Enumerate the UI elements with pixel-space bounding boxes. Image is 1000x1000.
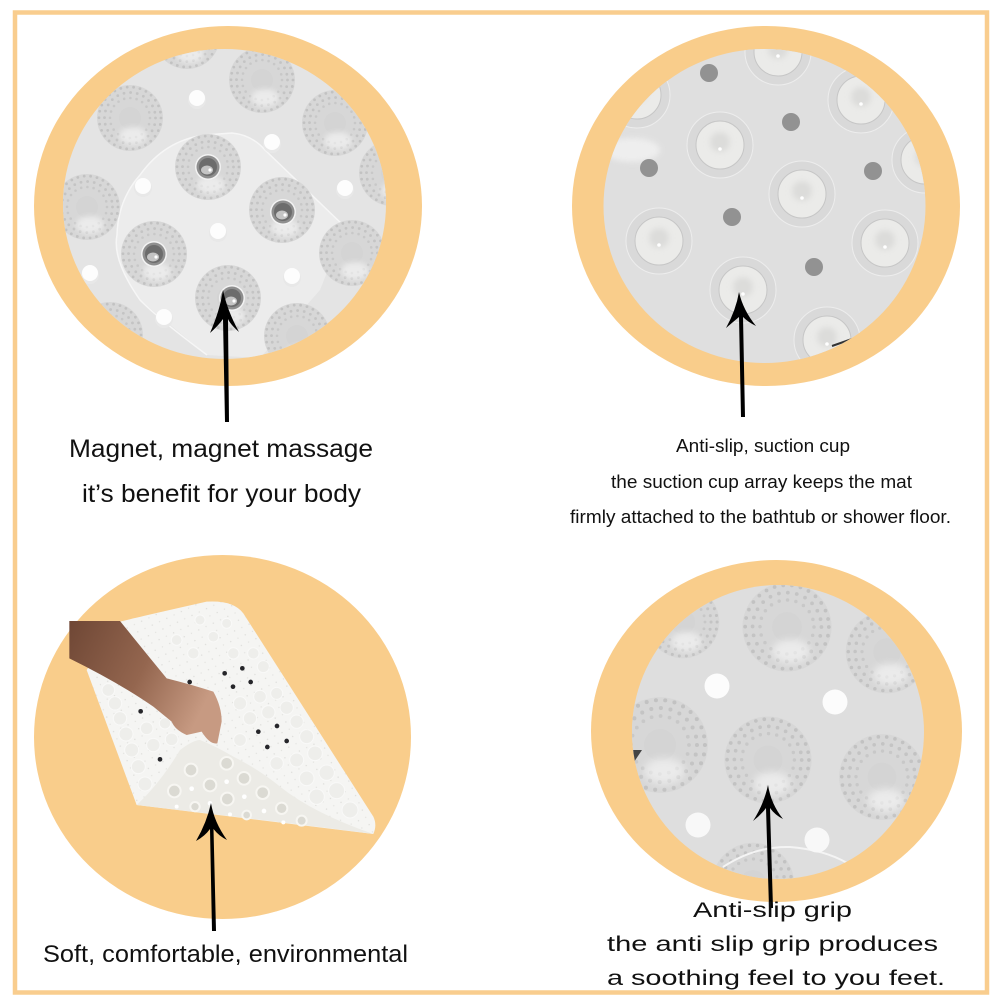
caption: magnet: it’s benefit for your body [82, 480, 362, 508]
caption: soft: Soft, comfortable, environmental [43, 941, 408, 968]
caption: anti-slip grip: Anti-slip grip [693, 899, 852, 922]
hand and arm [69, 621, 222, 744]
circle: suction cup photo [572, 19, 960, 386]
caption: suction cup: firmly attached to the bathtub or shower floor. [570, 507, 951, 527]
arrow [726, 292, 756, 417]
caption: magnet: Magnet, magnet massage [69, 435, 373, 463]
caption: anti-slip grip [607, 899, 945, 990]
caption: anti-slip grip: the anti slip grip produces [607, 933, 938, 956]
arrow [210, 290, 239, 422]
caption: anti-slip grip: a soothing feel to you feet. [607, 967, 945, 990]
caption: suction cup [570, 436, 951, 527]
caption: suction cup: the suction cup array keeps the mat [611, 472, 912, 492]
arrow [196, 803, 227, 931]
circle: grip photo [591, 560, 962, 925]
panel: anti-slip grip [591, 560, 962, 990]
panel: soft comfortable mat [34, 555, 411, 968]
mat flap [137, 740, 373, 834]
caption: magnet [69, 435, 373, 508]
circle: magnet photo [34, 3, 425, 386]
panel: magnet massage [34, 3, 425, 508]
mat [87, 601, 375, 834]
circle: mat being lifted [34, 555, 411, 919]
panel: suction cup [570, 19, 960, 527]
caption: suction cup: Anti-slip, suction cup [676, 436, 850, 456]
arrow [753, 785, 783, 908]
